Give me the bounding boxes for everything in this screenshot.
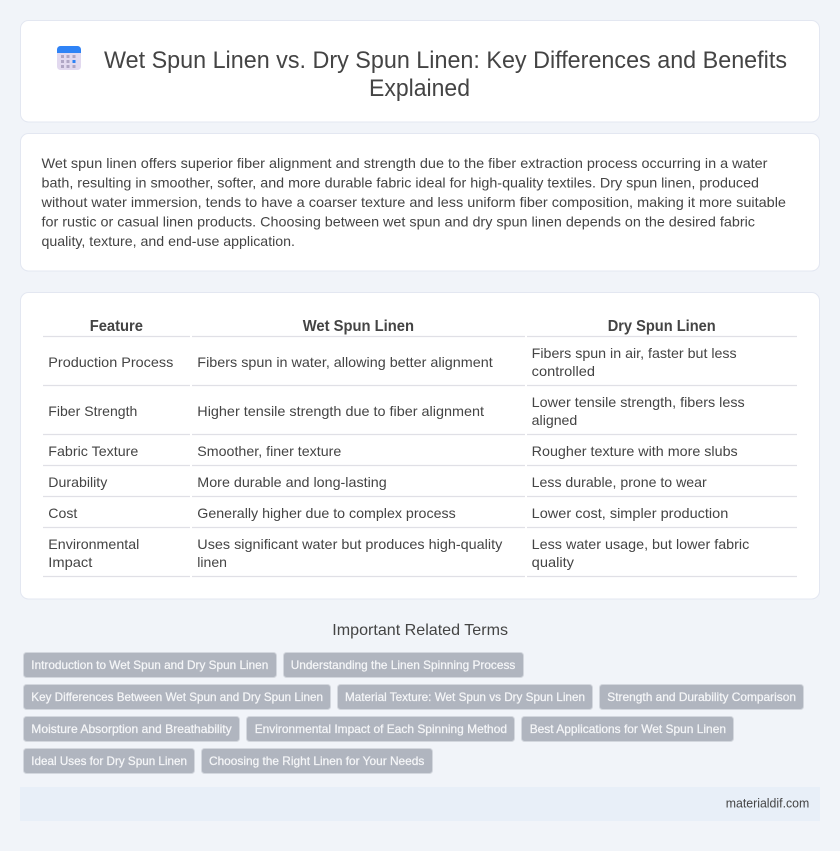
tag: Environmental Impact of Each Spinning Method bbox=[255, 722, 507, 736]
row: production process bbox=[48, 345, 737, 379]
tag: Choosing the Right Linen for Your Needs bbox=[209, 754, 424, 768]
tag: Key Differences Between Wet Spun and Dry Spun Linen bbox=[31, 690, 323, 704]
row: durability: More durable and long-lasting bbox=[197, 474, 387, 490]
tag bbox=[246, 716, 514, 742]
table header: Dry Spun Linen bbox=[608, 318, 716, 335]
text block: introduction paragraph bbox=[40, 155, 786, 249]
tag list bbox=[24, 652, 804, 774]
tag bbox=[24, 716, 240, 742]
tag bbox=[202, 748, 432, 774]
footer bbox=[20, 787, 820, 821]
tag bbox=[284, 652, 524, 678]
title bbox=[104, 47, 787, 102]
table header: Feature bbox=[90, 318, 143, 335]
table header bbox=[90, 318, 716, 335]
text block: introduction paragraph: quality, texture, and end-use application. bbox=[42, 233, 295, 249]
table header: Wet Spun Linen bbox=[303, 318, 414, 335]
row: fiber strength: Higher tensile strength due to fiber alignment bbox=[197, 403, 484, 419]
tag: Strength and Durability Comparison bbox=[607, 690, 796, 704]
tag bbox=[24, 652, 276, 678]
row: fiber strength: Lower tensile strength, fibers less bbox=[532, 394, 745, 410]
tag bbox=[338, 684, 592, 710]
tag: Moisture Absorption and Breathability bbox=[31, 722, 232, 736]
title: Explained bbox=[369, 75, 470, 102]
tag: Best Applications for Wet Spun Linen bbox=[530, 722, 726, 736]
tag: Material Texture: Wet Spun vs Dry Spun Linen bbox=[345, 690, 585, 704]
row: production process: Production Process bbox=[48, 354, 173, 370]
tag: Understanding the Linen Spinning Process bbox=[291, 658, 515, 672]
row: fabric texture: Smoother, finer texture bbox=[197, 443, 342, 459]
tag bbox=[24, 684, 330, 710]
row: environmental impact: Less water usage, but lower fabric bbox=[532, 536, 749, 552]
text block: introduction paragraph: without water immersion, tends to have a coarser texture and less uniform fiber composition, making it more suitable bbox=[40, 194, 786, 210]
footer: materialdif.com bbox=[726, 796, 809, 810]
row: fabric texture bbox=[48, 443, 738, 459]
row: environmental impact: Impact bbox=[48, 554, 92, 570]
panel: title card bbox=[20, 20, 820, 122]
row: environmental impact: quality bbox=[532, 554, 574, 570]
row: production process: Fibers spun in water, allowing better alignment bbox=[197, 354, 493, 370]
row: durability: Less durable, prone to wear bbox=[532, 474, 707, 490]
row: durability: Durability bbox=[48, 474, 107, 490]
row: durability bbox=[48, 474, 707, 490]
tag: Ideal Uses for Dry Spun Linen bbox=[31, 754, 187, 768]
row: fiber strength: Fiber Strength bbox=[48, 403, 137, 419]
text block: introduction paragraph: for rustic or casual linen products. Choosing between wet spun and dry spun linen depends on the desired fabric bbox=[42, 214, 755, 230]
row: cost: Cost bbox=[48, 505, 77, 521]
panel: comparison table bbox=[20, 292, 820, 599]
row: environmental impact: linen bbox=[197, 554, 227, 570]
row: fabric texture: Fabric Texture bbox=[48, 443, 139, 459]
tag bbox=[522, 716, 734, 742]
row: cost bbox=[48, 505, 728, 521]
row: fiber strength bbox=[48, 394, 745, 428]
text block: introduction paragraph: Wet spun linen offers superior fiber alignment and strength due to the fiber extraction process occurring in a water bbox=[42, 155, 768, 171]
row: cost: Generally higher due to complex process bbox=[197, 505, 456, 521]
row: production process: Fibers spun in air, faster but less bbox=[532, 345, 737, 361]
heading: important related terms: Important Related Terms bbox=[332, 622, 508, 639]
tag bbox=[600, 684, 804, 710]
text block: introduction paragraph: bath, resulting in smoother, softer, and more durable fabric ideal for high-quality textiles. Dry spun linen, produced bbox=[42, 174, 759, 190]
row: fiber strength: aligned bbox=[532, 412, 577, 428]
row: cost: Lower cost, simpler production bbox=[532, 505, 728, 521]
tag bbox=[24, 748, 194, 774]
row: production process: controlled bbox=[532, 363, 595, 379]
icon: calendar bbox=[57, 46, 81, 70]
row: environmental impact: Uses significant water but produces high-quality bbox=[197, 536, 502, 552]
row: fabric texture: Rougher texture with more slubs bbox=[532, 443, 738, 459]
title: Wet Spun Linen vs. Dry Spun Linen: Key Differences and Benefits bbox=[104, 47, 787, 74]
tag: Introduction to Wet Spun and Dry Spun Linen bbox=[31, 658, 268, 672]
panel: introduction bbox=[20, 134, 820, 271]
row: environmental impact bbox=[48, 536, 749, 570]
row: environmental impact: Environmental bbox=[48, 536, 139, 552]
